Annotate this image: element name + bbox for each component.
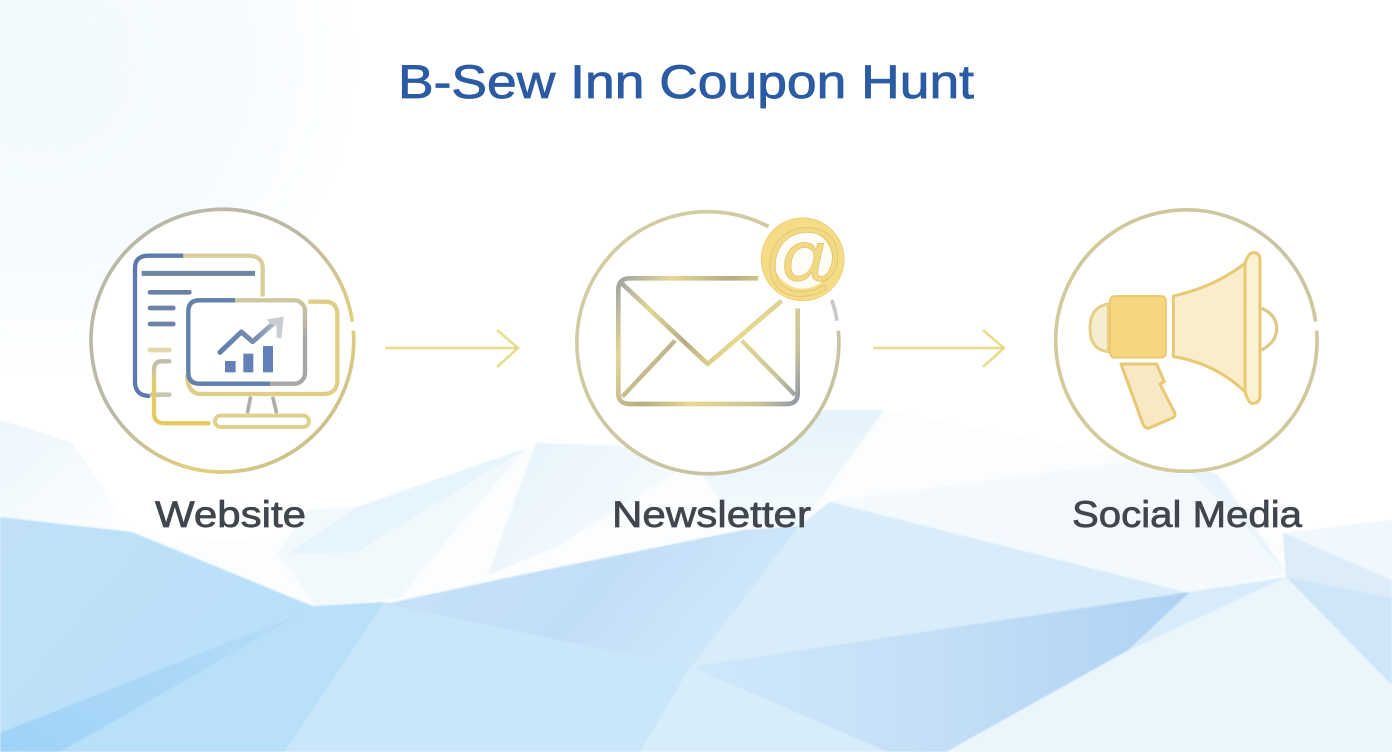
icon: envelope with at sign: @	[762, 213, 843, 302]
label: newsletter: Newsletter	[612, 494, 811, 535]
panel: newsletter	[577, 212, 844, 535]
icon: megaphone	[1056, 210, 1317, 473]
title: B-Sew Inn Coupon Hunt	[398, 55, 974, 108]
panel: social media	[1056, 210, 1317, 535]
arrow: newsletter to social media	[873, 330, 1004, 367]
label: social media: Social Media	[1072, 494, 1302, 535]
icon: website and monitor	[91, 209, 354, 474]
label: website: Website	[155, 494, 306, 535]
arrow: website to newsletter	[385, 330, 518, 367]
panel: website	[91, 209, 354, 535]
icon: envelope with at sign	[577, 212, 844, 474]
